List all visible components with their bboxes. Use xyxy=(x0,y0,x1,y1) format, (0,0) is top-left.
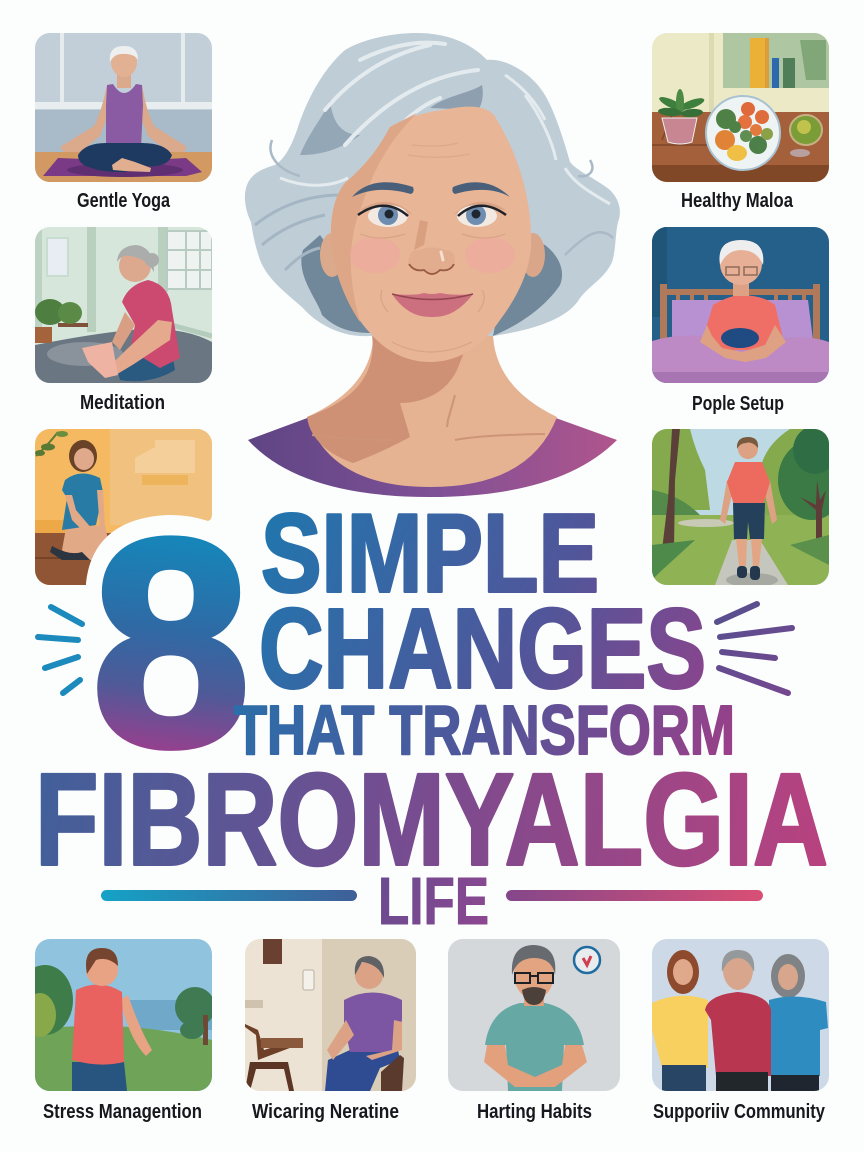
eyebrows xyxy=(352,182,414,197)
wrinkles xyxy=(360,234,505,352)
title: LIFE: LIFE xyxy=(378,864,489,939)
neck and chest xyxy=(307,325,557,487)
person in bed xyxy=(700,240,786,362)
cheeks xyxy=(350,237,400,273)
label: gentle yoga: Gentle Yoga xyxy=(77,190,171,212)
person in yellow xyxy=(652,950,708,1091)
burst lines right xyxy=(717,604,792,693)
portrait: woman with silver hair xyxy=(245,33,620,497)
label: stress management: Stress Managention xyxy=(43,1101,202,1123)
walking man xyxy=(720,437,777,580)
man with glasses xyxy=(484,945,587,1091)
potted plant xyxy=(658,89,706,144)
panel: healthy habits xyxy=(448,939,620,1091)
panel: healthy meals xyxy=(652,33,829,182)
standing man xyxy=(72,948,152,1091)
plate of food xyxy=(706,96,780,170)
panel: gentle yoga xyxy=(35,33,212,182)
divider right xyxy=(506,890,763,901)
label: sitting indoors: Wicaring Neratine xyxy=(252,1101,399,1123)
face xyxy=(331,107,531,362)
person in blue xyxy=(769,954,828,1091)
stretch figure xyxy=(50,440,108,560)
green bowl xyxy=(790,115,822,145)
label: supportive community: Supporiiv Community xyxy=(653,1101,826,1123)
panel: stress management xyxy=(35,939,212,1091)
panel: park walk xyxy=(652,429,829,585)
person in red xyxy=(705,950,771,1091)
title: SIMPLE: SIMPLE xyxy=(261,492,599,616)
panel: sitting indoors xyxy=(245,939,416,1091)
wooden chair xyxy=(245,1024,303,1091)
seated man xyxy=(325,956,404,1091)
smile xyxy=(392,293,473,317)
eyes xyxy=(368,205,408,227)
hair mass xyxy=(245,33,620,336)
title numeral 8: 8 xyxy=(91,477,251,808)
white cut-out behind numeral xyxy=(86,514,218,592)
shirt xyxy=(248,417,617,497)
clock icon xyxy=(574,947,600,973)
title: CHANGES: CHANGES xyxy=(259,586,706,712)
label: meditation: Meditation xyxy=(80,392,165,414)
panel: warm room stretch xyxy=(35,429,212,585)
meditation figure xyxy=(82,245,180,381)
panel: supportive community xyxy=(652,939,829,1091)
yoga figure xyxy=(60,46,187,172)
ears xyxy=(320,233,344,277)
divider left xyxy=(101,890,357,901)
panel: meditation xyxy=(35,227,212,383)
eye sockets xyxy=(360,202,506,214)
title: THAT TRANSFORM: THAT TRANSFORM xyxy=(234,691,735,769)
panel: bed setup xyxy=(652,227,829,383)
label: healthy habits: Harting Habits xyxy=(477,1101,592,1123)
burst lines left xyxy=(38,607,82,693)
label: healthy meals: Healthy Maloa xyxy=(681,190,794,212)
nose xyxy=(408,220,455,274)
label: bed setup: Pople Setup xyxy=(692,393,784,415)
forehead lines xyxy=(408,143,470,157)
